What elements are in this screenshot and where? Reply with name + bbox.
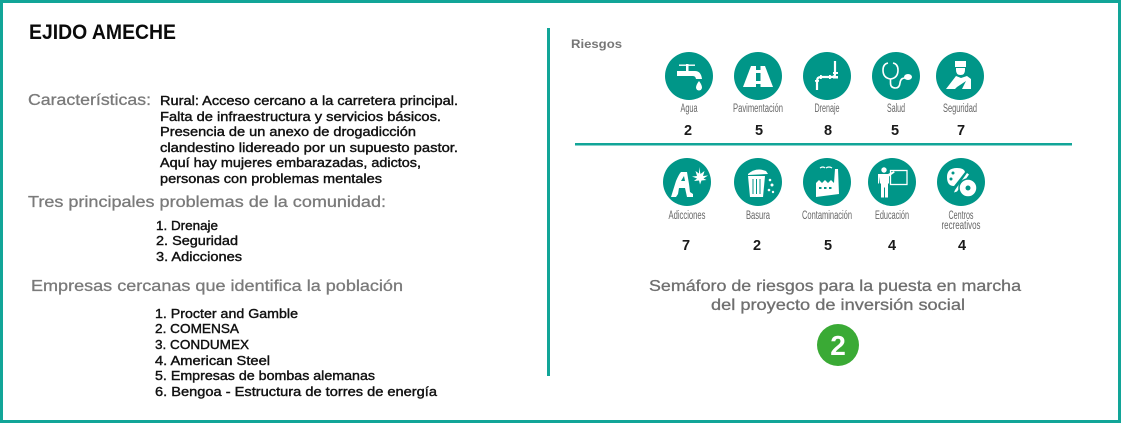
icon: agua (665, 52, 713, 100)
icon: pavimentación (734, 52, 782, 100)
label: centros recreativos: Centros (948, 210, 974, 222)
label: seguridad: Seguridad (943, 103, 977, 115)
label: agua: Agua (680, 103, 698, 115)
list: problemas: 2. Seguridad (156, 233, 238, 248)
label: drenaje: Drenaje (814, 103, 840, 115)
icon: drenaje (803, 52, 851, 100)
panel: risks row 1 (665, 52, 984, 139)
text block: características: Falta de infraestructura y servicios básicos. (160, 109, 441, 124)
number: adicciones: 7 (682, 238, 690, 254)
number: centros recreativos: 4 (958, 238, 966, 254)
text block: características: Rural: Acceso cercano a la carretera principal. (160, 93, 458, 108)
text block: características: clandestino lidereado por un supuesto pastor. (160, 140, 458, 155)
number: seguridad: 7 (957, 123, 965, 139)
list: empresas: 5. Empresas de bombas alemanas (155, 368, 376, 383)
heading: empresas cercanas: Empresas cercanas que identifica la población (31, 278, 403, 295)
number: educación: 4 (888, 238, 896, 254)
heading: características: Características: (28, 92, 151, 109)
heading: riesgos: Riesgos (571, 39, 622, 51)
label: educación: Educación (875, 210, 909, 222)
list: empresas: 1. Procter and Gamble (155, 306, 298, 321)
text block: características: personas con problemas mentales (160, 171, 383, 186)
label: contaminación: Contaminación (802, 210, 852, 222)
icon: contaminación (803, 158, 851, 206)
list: problemas: 3. Adicciones (156, 249, 243, 264)
label: centros recreativos: recreativos (942, 220, 981, 232)
icon: adicciones (663, 158, 711, 206)
list: problemas (156, 218, 243, 264)
panel: risks row 2 (663, 158, 985, 254)
list: empresas: 3. CONDUMEX (155, 337, 249, 352)
risk indicator: 2: 2 (830, 330, 846, 361)
icon: salud (872, 52, 920, 100)
text block: características (160, 93, 458, 186)
icon: seguridad (936, 52, 984, 100)
icon: centros recreativos (937, 158, 985, 206)
heading: tres principales problemas: Tres principales problemas de la comunidad: (28, 194, 386, 211)
number: drenaje: 8 (824, 123, 832, 139)
label: adicciones: Adicciones (668, 210, 706, 222)
label: pavimentación: Pavimentación (733, 103, 783, 115)
number: pavimentación: 5 (755, 123, 763, 139)
list: empresas: 6. Bengoa - Estructura de torres de energía (155, 384, 438, 399)
number: salud: 5 (891, 123, 899, 139)
heading: semáforo de riesgos: del proyecto de inversión social (711, 297, 965, 314)
number: agua: 2 (684, 123, 692, 139)
icon: educación (868, 158, 916, 206)
panel: community profile (28, 92, 458, 399)
icon: basura (734, 158, 782, 206)
list: empresas: 2. COMENSA (155, 321, 239, 336)
label: centros recreativos (942, 210, 981, 232)
list: problemas: 1. Drenaje (156, 218, 218, 233)
heading: semáforo de riesgos (649, 278, 1021, 314)
number: basura: 2 (753, 238, 761, 254)
risk indicator: 2 (817, 324, 859, 366)
heading: semáforo de riesgos: Semáforo de riesgos para la puesta en marcha (649, 278, 1021, 295)
text block: características: Aquí hay mujeres embarazadas, adictos, (160, 155, 421, 170)
label: salud: Salud (887, 103, 905, 115)
list: empresas (155, 306, 438, 399)
label: basura: Basura (746, 210, 770, 222)
text block: características: Presencia de un anexo de drogadicción (160, 124, 416, 139)
list: empresas: 4. American Steel (155, 353, 270, 368)
title: EJIDO AMECHE (29, 21, 176, 44)
number: contaminación: 5 (824, 238, 832, 254)
